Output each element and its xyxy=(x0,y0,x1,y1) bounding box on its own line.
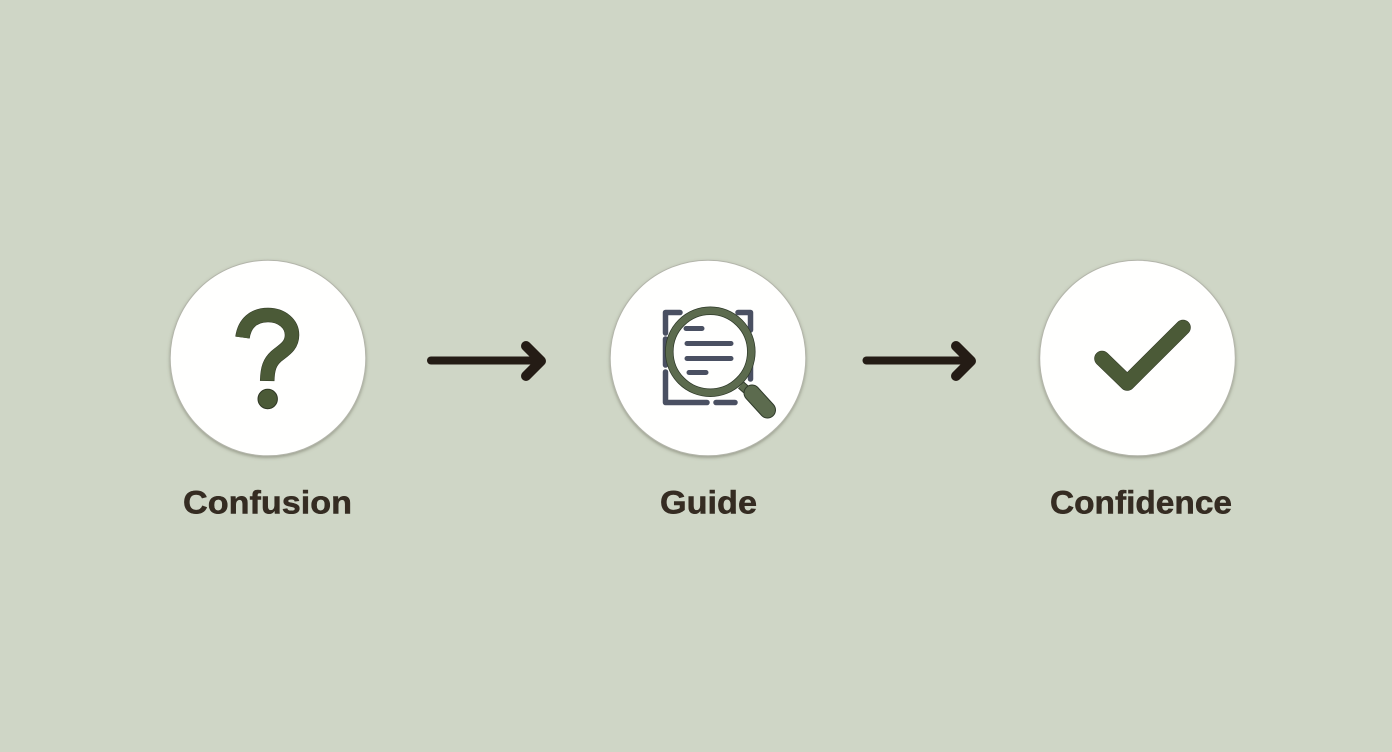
step: confidence xyxy=(1040,260,1235,520)
circle: confidence xyxy=(1040,260,1235,456)
icon: magnifying glass xyxy=(669,311,768,410)
step: guide xyxy=(610,260,806,520)
label: Guide: Guide xyxy=(660,484,757,520)
arrow: guide to confidence xyxy=(866,346,971,376)
icon: document frame xyxy=(666,312,750,402)
label: Confusion: Confusion xyxy=(183,484,352,520)
label: Confidence: Confidence xyxy=(1050,484,1232,520)
lens xyxy=(669,311,751,393)
icon: question mark xyxy=(242,315,292,409)
icon: check mark xyxy=(1102,328,1183,383)
circle: guide xyxy=(610,260,806,456)
arrow: confusion to guide xyxy=(431,346,541,376)
handle xyxy=(741,385,768,410)
step: confusion xyxy=(170,260,366,520)
circle: confusion xyxy=(170,260,366,456)
icon: text lines xyxy=(686,328,731,372)
